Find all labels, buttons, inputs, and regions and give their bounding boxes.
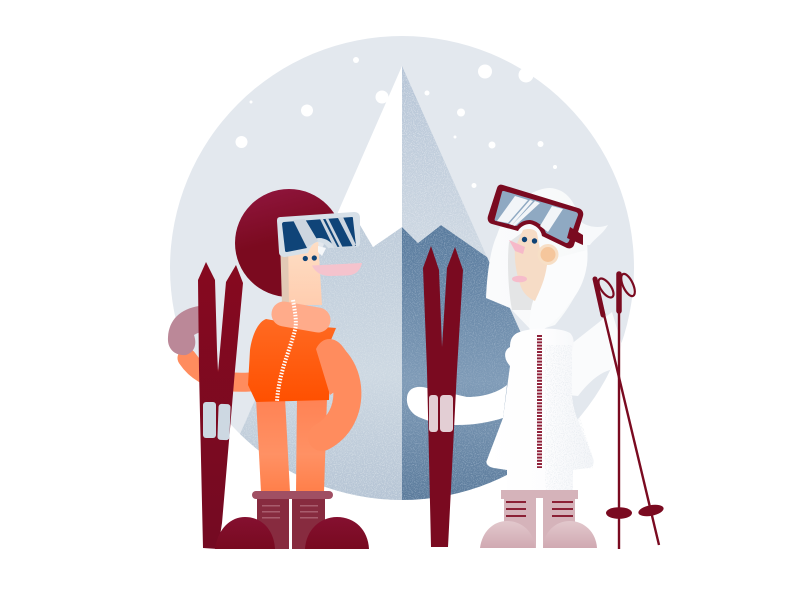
boot toe left (480, 521, 535, 548)
boot toe right (543, 521, 597, 548)
mountain: upper right face (402, 66, 487, 257)
shoulder over vest (316, 339, 356, 395)
pole grips (595, 279, 603, 315)
boot cuff (252, 491, 333, 499)
skier left: right arm (322, 352, 347, 437)
skier left: back arm and mitten (168, 306, 250, 382)
goggle strap (567, 227, 583, 245)
nose (509, 240, 525, 254)
skier right: face (509, 229, 558, 301)
skier right: hood front flap (529, 250, 587, 335)
mountain: right face grain (402, 226, 520, 500)
pole wrist loops (596, 276, 616, 300)
ski poles (595, 272, 665, 549)
illustration: two skiers in front of a snowy mountain (168, 36, 664, 549)
skier left: goggles (277, 212, 360, 257)
hood tuft (580, 222, 608, 245)
mountain (200, 66, 600, 510)
skier left: helmet (235, 189, 343, 297)
coat zipper (537, 335, 542, 468)
skier right: coat (486, 328, 594, 492)
boot laces (506, 501, 573, 517)
boot laces (262, 505, 318, 518)
skier right: goggles (488, 185, 583, 248)
lips (512, 276, 527, 282)
mountain: white snow cap (335, 66, 402, 247)
skier right: white arm holding skis (407, 385, 507, 425)
skier left: legs (256, 398, 327, 492)
background circle (170, 36, 634, 500)
pole vertical (618, 272, 620, 549)
skier left: zipper (277, 300, 296, 401)
ear (538, 244, 558, 265)
ski binding pads (429, 395, 453, 432)
goggle reflections (293, 217, 356, 248)
boot toe left (215, 517, 275, 549)
mountain: shaded right lower face (402, 225, 520, 500)
boot toe right (305, 517, 369, 549)
skier left: orange vest (248, 319, 336, 402)
pole baskets (606, 507, 632, 519)
nose (312, 263, 362, 276)
eyes (522, 237, 537, 244)
coat grain (545, 345, 593, 490)
skier right: boots (480, 490, 597, 548)
skier right: hood (486, 188, 608, 332)
inner hood shadow (508, 232, 535, 310)
mountain: left face grain (241, 226, 402, 500)
mountain: lit left lower face (240, 226, 402, 500)
snowflakes (236, 57, 557, 188)
eyes (303, 255, 317, 261)
goggle reflections (497, 196, 563, 232)
skier left: scarf (284, 314, 318, 320)
centre skis (423, 246, 463, 547)
skis left (198, 262, 243, 549)
boot cuff (501, 490, 578, 499)
mountain: upper right grain (402, 66, 487, 257)
ski binding pads (203, 402, 231, 440)
pole diagonal (597, 285, 659, 545)
icon: mitten (168, 306, 212, 355)
nose bridge highlight (318, 246, 326, 256)
skier left: neck and face (280, 238, 362, 305)
skier left: boots (215, 491, 369, 549)
skier right: raised sleeve (568, 312, 622, 396)
